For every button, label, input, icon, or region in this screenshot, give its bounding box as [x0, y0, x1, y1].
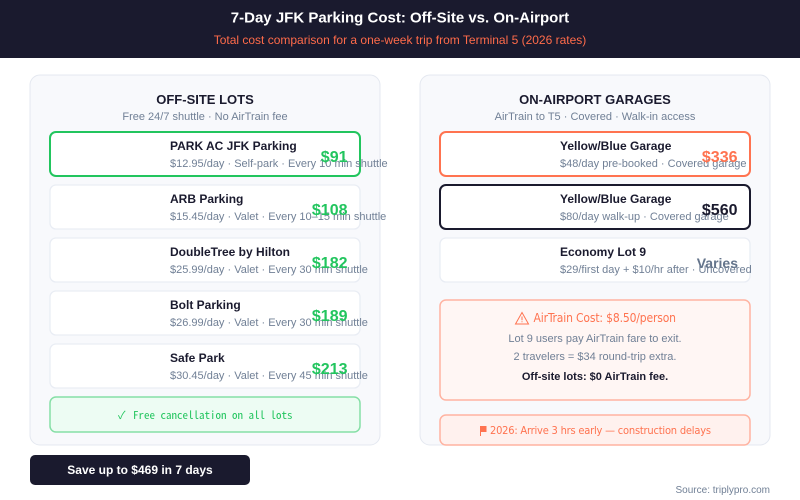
free cancellation note: Free cancellation on all lots — [133, 407, 292, 423]
savings button — [30, 455, 250, 485]
lot: ARB Parking — [50, 185, 386, 229]
savings button: Save up to $469 in 7 days — [67, 463, 213, 477]
garage: Yellow/Blue pre-booked: Yellow/Blue Garage — [560, 139, 672, 153]
free cancellation note: ✓ — [118, 407, 126, 423]
lot: DoubleTree by Hilton: $182 — [312, 255, 348, 272]
subtitle: Total cost comparison for a one-week trip from Terminal 5 (2026 rates) — [214, 33, 586, 47]
lot: PARK AC JFK Parking: PARK AC JFK Parking — [170, 139, 297, 153]
lot: ARB Parking: ARB Parking — [170, 192, 243, 206]
lot: Safe Park: Safe Park — [170, 351, 225, 365]
garage: Yellow/Blue walk-up: $560 — [702, 202, 738, 219]
construction warning — [440, 415, 750, 445]
AirTrain cost callout: Lot 9 users pay AirTrain fare to exit. — [508, 333, 682, 345]
off-site heading: OFF-SITE LOTS — [156, 92, 254, 107]
garage: Economy Lot 9: $29/first day + $10/hr after · Uncovered — [560, 264, 752, 276]
panel: off-site lots — [30, 75, 388, 445]
on-airport subheading: AirTrain to T5 · Covered · Walk-in access — [495, 111, 696, 123]
lot: Safe Park: $30.45/day · Valet · Every 45 min shuttle — [170, 370, 368, 382]
lot: DoubleTree by Hilton — [50, 238, 368, 282]
AirTrain cost callout: Off-site lots: $0 AirTrain fee. — [522, 371, 668, 383]
lot: Safe Park — [50, 344, 368, 388]
AirTrain cost callout: 2 travelers = $34 round-trip extra. — [514, 351, 676, 363]
source note: Source: triplypro.com — [676, 485, 770, 496]
garage: Yellow/Blue walk-up: $80/day walk-up · Covered garage — [560, 211, 729, 223]
garage: Yellow/Blue walk-up: Yellow/Blue Garage — [560, 192, 672, 206]
panel: on-airport garages — [420, 75, 770, 445]
garage: Economy Lot 9 — [440, 238, 752, 282]
construction warning: 2026: Arrive 3 hrs early — construction delays — [490, 424, 711, 437]
AirTrain cost callout — [440, 300, 750, 400]
lot: Safe Park: $213 — [312, 361, 348, 378]
garage: Yellow/Blue pre-booked: $336 — [702, 149, 738, 166]
lot: ARB Parking: $108 — [312, 202, 348, 219]
header band — [0, 0, 800, 58]
lot: Bolt Parking: $189 — [312, 308, 348, 325]
AirTrain cost callout: AirTrain Cost: $8.50/person — [534, 311, 676, 325]
lot: Bolt Parking — [50, 291, 368, 335]
lot: DoubleTree by Hilton: $25.99/day · Valet · Every 30 min shuttle — [170, 264, 368, 276]
garage: Economy Lot 9: Economy Lot 9 — [560, 245, 646, 259]
title: 7-Day JFK Parking Cost: Off-Site vs. On-Airport — [231, 10, 569, 26]
lot: Bolt Parking: Bolt Parking — [170, 298, 241, 312]
garage: Yellow/Blue pre-booked: $48/day pre-booked · Covered garage — [560, 158, 747, 170]
free cancellation note — [50, 397, 360, 432]
on-airport heading: ON-AIRPORT GARAGES — [519, 92, 671, 107]
lot: Bolt Parking: $26.99/day · Valet · Every 30 min shuttle — [170, 317, 368, 329]
lot: PARK AC JFK Parking — [50, 132, 388, 176]
garage: Yellow/Blue walk-up — [440, 185, 750, 229]
lot: PARK AC JFK Parking: $91 — [321, 149, 348, 166]
icon: warning triangle — [516, 312, 528, 324]
lot: DoubleTree by Hilton: DoubleTree by Hilton — [170, 245, 290, 259]
off-site subheading: Free 24/7 shuttle · No AirTrain fee — [122, 111, 288, 123]
garage: Yellow/Blue pre-booked — [440, 132, 750, 176]
lot: PARK AC JFK Parking: $12.95/day · Self-park · Every 10 min shuttle — [170, 158, 388, 170]
lot: ARB Parking: $15.45/day · Valet · Every 10–15 min shuttle — [170, 211, 386, 223]
garage: Economy Lot 9: Varies — [697, 255, 738, 271]
icon: flag — [480, 426, 486, 436]
